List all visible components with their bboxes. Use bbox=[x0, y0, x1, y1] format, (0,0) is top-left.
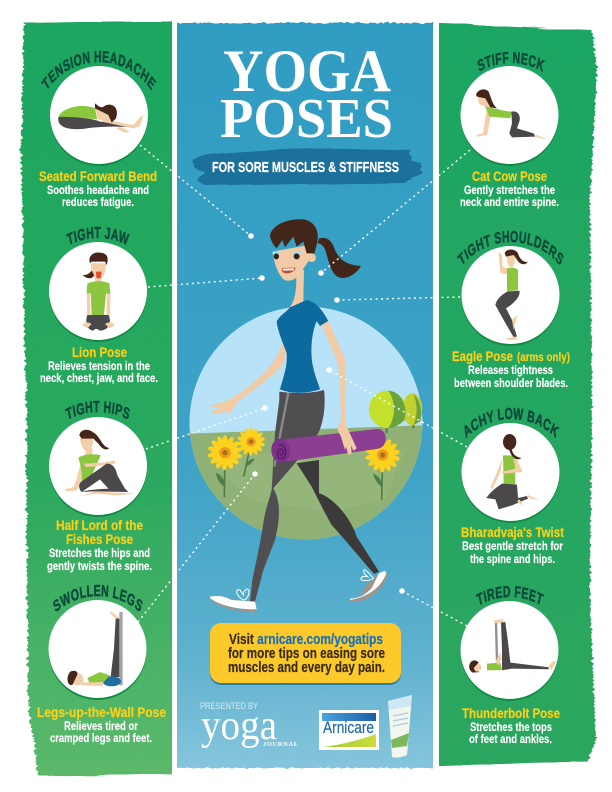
pose name: Half Lord of the bbox=[56, 518, 143, 533]
pose name: Relieves tension in the bbox=[48, 359, 150, 373]
pose name bbox=[452, 349, 570, 390]
left pose: swollen legs bbox=[37, 584, 166, 745]
pose name: Legs-up-the-Wall Pose bbox=[37, 705, 166, 720]
illustration: eagle pose bbox=[495, 250, 528, 340]
left pose: tight hips: TIGHT HIPS bbox=[65, 400, 130, 419]
pose name: Gently stretches the bbox=[464, 183, 555, 197]
illustration: seated forward bend bbox=[58, 103, 143, 133]
left pose: swollen legs: SWOLLEN LEGS bbox=[53, 584, 143, 612]
pose name bbox=[39, 169, 157, 209]
left pose: tension headache: TENSION HEADACHE bbox=[41, 50, 156, 90]
presented by: PRESENTED BY bbox=[200, 701, 259, 712]
pose name: Cat Cow Pose bbox=[472, 169, 547, 184]
pose name: between shoulder blades. bbox=[454, 376, 568, 390]
right pose: achy low back bbox=[461, 408, 564, 566]
pose name: the spine and hips. bbox=[470, 552, 555, 566]
eyes and mouth bbox=[272, 251, 303, 254]
pose name: Lion Pose bbox=[72, 345, 127, 360]
left pose: tight jaw: TIGHT JAW bbox=[66, 226, 130, 245]
scene: circle landscape bbox=[180, 306, 430, 545]
callout bbox=[210, 623, 401, 685]
front leg and hips bbox=[250, 390, 325, 602]
shirt bbox=[277, 300, 328, 393]
pose name: Relieves tired or bbox=[64, 719, 138, 733]
panel: right green column bbox=[420, 22, 597, 766]
icon: sunflowers bbox=[207, 427, 400, 500]
pose name bbox=[461, 525, 564, 566]
right pose: tight shoulders: TIGHT SHOULDERS bbox=[457, 230, 564, 264]
hair bbox=[270, 219, 318, 253]
pose name: Soothes headache and bbox=[47, 183, 149, 197]
title bbox=[220, 38, 393, 150]
pose name bbox=[460, 169, 559, 209]
right pose: achy low back: ACHY LOW BACK bbox=[464, 408, 560, 438]
right pose: stiff neck: STIFF NECK bbox=[478, 52, 546, 72]
illustration: half lord of the fishes bbox=[65, 430, 135, 495]
pose name: Stretches the tops bbox=[470, 720, 552, 734]
arm: left bbox=[208, 339, 285, 416]
right pose: stiff neck bbox=[460, 52, 559, 209]
back leg bbox=[297, 460, 379, 574]
logo: yoga journal: JOURNAL bbox=[263, 741, 299, 748]
pose name: Thunderbolt Pose bbox=[462, 706, 560, 721]
mat bbox=[281, 429, 386, 462]
pose name: Bharadvaja's Twist bbox=[461, 525, 564, 540]
panel: left green column bbox=[21, 20, 190, 776]
neck and face bbox=[273, 245, 312, 309]
pose name: of feet and ankles. bbox=[469, 732, 552, 746]
pose name bbox=[40, 345, 158, 385]
pose name: Best gentle stretch for bbox=[462, 539, 563, 553]
pose name: Stretches the hips and bbox=[49, 546, 150, 560]
illustration: legs up the wall bbox=[67, 610, 123, 686]
logo: yoga journal: yoga bbox=[201, 703, 277, 749]
pose name: Releases tightness bbox=[468, 363, 553, 377]
title: YOGA bbox=[223, 38, 391, 104]
subtitle banner: FOR SORE MUSCLES & STIFFNESS bbox=[212, 159, 399, 176]
title: POSES bbox=[220, 88, 393, 150]
connector end dots bbox=[248, 233, 405, 594]
subtitle banner bbox=[192, 149, 422, 186]
illustration: thunderbolt pose bbox=[469, 619, 556, 673]
illustration: cat cow bbox=[476, 89, 547, 139]
logo: arnicare bbox=[319, 710, 379, 750]
illustration: bharadvaja's twist bbox=[486, 434, 540, 509]
pose name: gently twists the spine. bbox=[47, 559, 152, 573]
callout: muscles and every day pain. bbox=[228, 659, 385, 676]
pose name: Eagle Pose bbox=[452, 349, 513, 364]
shoes bbox=[208, 572, 388, 613]
pose name bbox=[462, 706, 560, 746]
arm: right with hand bbox=[322, 321, 357, 455]
pose name: Fishes Pose bbox=[66, 532, 133, 547]
callout: for more tips on easing sore bbox=[228, 645, 385, 662]
left pose: tension headache bbox=[39, 50, 157, 209]
dotted connector lines bbox=[138, 145, 470, 626]
panel: center blue column bbox=[165, 23, 445, 768]
pose name: reduces fatigue. bbox=[62, 195, 134, 209]
pose name: cramped legs and feet. bbox=[50, 731, 152, 745]
illustration: lion pose bbox=[82, 252, 115, 331]
pose name: Seated Forward Bend bbox=[39, 169, 157, 184]
callout: Visit arnicare.com/yogatips bbox=[229, 631, 383, 648]
pose name bbox=[37, 705, 166, 745]
pose name bbox=[47, 518, 152, 573]
left pose: tight jaw bbox=[40, 226, 158, 385]
icon: cream tube bbox=[388, 695, 412, 758]
left pose: tight hips bbox=[47, 400, 152, 573]
pose name: neck, chest, jaw, and face. bbox=[40, 371, 158, 385]
icon: trees bbox=[369, 391, 422, 433]
right pose: tight shoulders bbox=[452, 230, 570, 390]
logo: arnicare: Arnicare bbox=[323, 718, 374, 737]
pose name: (arms only) bbox=[517, 352, 570, 364]
figure: walking woman with mat bbox=[208, 219, 388, 613]
right pose: tired feet: TIRED FEET bbox=[476, 586, 544, 605]
pose name: neck and entire spine. bbox=[460, 195, 559, 209]
right pose: tired feet bbox=[460, 586, 560, 746]
